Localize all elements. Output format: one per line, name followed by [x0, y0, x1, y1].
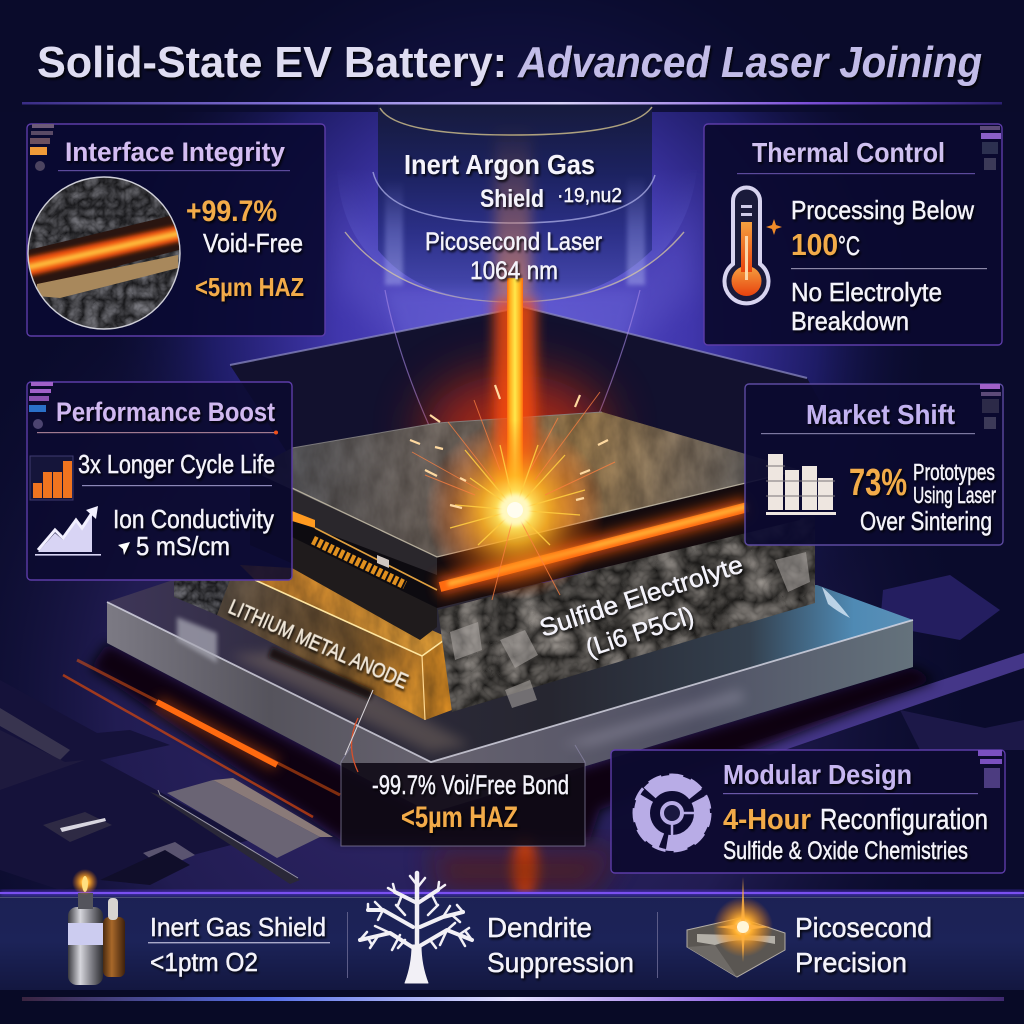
icon: thermometer — [725, 188, 782, 303]
label: lithium metal anode: LITHIUM METAL ANODE — [225, 595, 411, 694]
stats: +99.7% — [186, 195, 277, 228]
bottom band: Precision — [795, 947, 907, 978]
thermal text: °C — [838, 231, 860, 261]
bond text: -99.7% Voi/Free Bond — [372, 770, 569, 800]
bottom band — [0, 869, 1024, 1024]
laser label — [425, 228, 602, 285]
title divider — [22, 102, 1002, 104]
market stat — [849, 459, 996, 536]
upper cell layer — [250, 412, 800, 640]
tab decoration — [980, 384, 1001, 429]
laser label: Picosecond Laser — [425, 228, 602, 256]
thermal text: No Electrolyte — [791, 277, 942, 307]
heading: Interface Integrity — [65, 137, 285, 167]
stats: Void-Free — [203, 228, 303, 258]
panel: thermal control — [704, 124, 1002, 345]
heading: Thermal Control — [752, 137, 945, 168]
thermal text: Breakdown — [791, 306, 909, 336]
market stat: 73% — [849, 462, 907, 504]
bottom band: Suppression — [487, 947, 634, 978]
ion conductivity — [113, 504, 274, 561]
flat component — [167, 780, 320, 858]
panel: market shift — [745, 384, 1003, 545]
stats — [186, 195, 304, 302]
icon: gear — [634, 775, 710, 851]
argon gas label: Shield — [480, 185, 544, 213]
circuit board background details — [0, 575, 1024, 898]
gas shield text: Inert Gas Shield — [150, 912, 326, 942]
base plate — [107, 580, 913, 813]
laser head with gas shield — [337, 104, 697, 480]
modular text — [723, 804, 988, 865]
dendrite text: Dendrite — [487, 912, 592, 943]
title — [37, 38, 982, 87]
panel: modular design — [611, 750, 1005, 873]
callout: bond quality — [341, 690, 585, 846]
icon: picosecond crystal — [687, 877, 785, 977]
microscope view — [28, 178, 180, 328]
icon: dendrite tree — [360, 873, 472, 983]
thermal text: Processing Below — [791, 195, 974, 225]
modular text: 4-Hour — [723, 804, 811, 836]
panel: performance boost — [27, 382, 292, 580]
title: Solid-State EV Battery: — [37, 38, 507, 87]
stats: <5µm HAZ — [195, 272, 304, 302]
weld spark burst — [410, 385, 615, 600]
laser beam — [494, 278, 536, 515]
label: sulfide electrolyte: Sulfide Electrolyte — [536, 551, 746, 643]
icon: bar chart — [30, 456, 73, 500]
laser label: 1064 nm — [470, 257, 558, 285]
thermal text: 100 — [791, 227, 838, 262]
argon gas label — [404, 149, 622, 213]
heading: Market Shift — [806, 399, 955, 430]
haz text: <5µm HAZ — [401, 801, 518, 834]
icon: trend chart — [35, 506, 101, 556]
icon: gas cylinders — [68, 869, 125, 985]
right side bg strip — [737, 653, 1024, 755]
lithium metal anode — [174, 565, 452, 720]
tab decoration — [980, 126, 1001, 170]
dark housing behind the cell — [230, 290, 830, 485]
panel: interface integrity — [20, 124, 325, 336]
argon gas label: ·19,nu2 — [557, 185, 622, 207]
warm glow below callout — [512, 838, 538, 898]
ion conductivity: 5 mS/cm — [136, 531, 230, 561]
argon gas label: Inert Argon Gas — [404, 149, 595, 180]
tab decoration — [30, 124, 54, 171]
label: sulfide electrolyte: (Li6 P5Cl) — [582, 601, 697, 663]
bottom band: <1ptm O2 — [150, 947, 258, 977]
shadow under plate — [90, 643, 935, 840]
cycle life: 3x Longer Cycle Life — [78, 449, 275, 479]
glow line — [438, 507, 748, 587]
title: Advanced Laser Joining — [517, 38, 982, 87]
orange traces — [77, 660, 340, 795]
tab decoration — [978, 750, 1002, 788]
ion conductivity: Ion Conductivity — [113, 504, 274, 534]
market stat: Prototypes — [913, 459, 995, 485]
modular text: Reconfiguration — [820, 804, 988, 836]
heading: Modular Design — [723, 759, 912, 790]
tab decoration — [29, 382, 53, 429]
heading: Performance Boost — [56, 397, 275, 427]
sulfide electrolyte — [438, 515, 815, 712]
picosecond text: Picosecond — [795, 912, 932, 943]
thermal text — [791, 195, 974, 336]
icon: market bars — [766, 454, 836, 515]
market stat: Over Sintering — [860, 506, 992, 536]
